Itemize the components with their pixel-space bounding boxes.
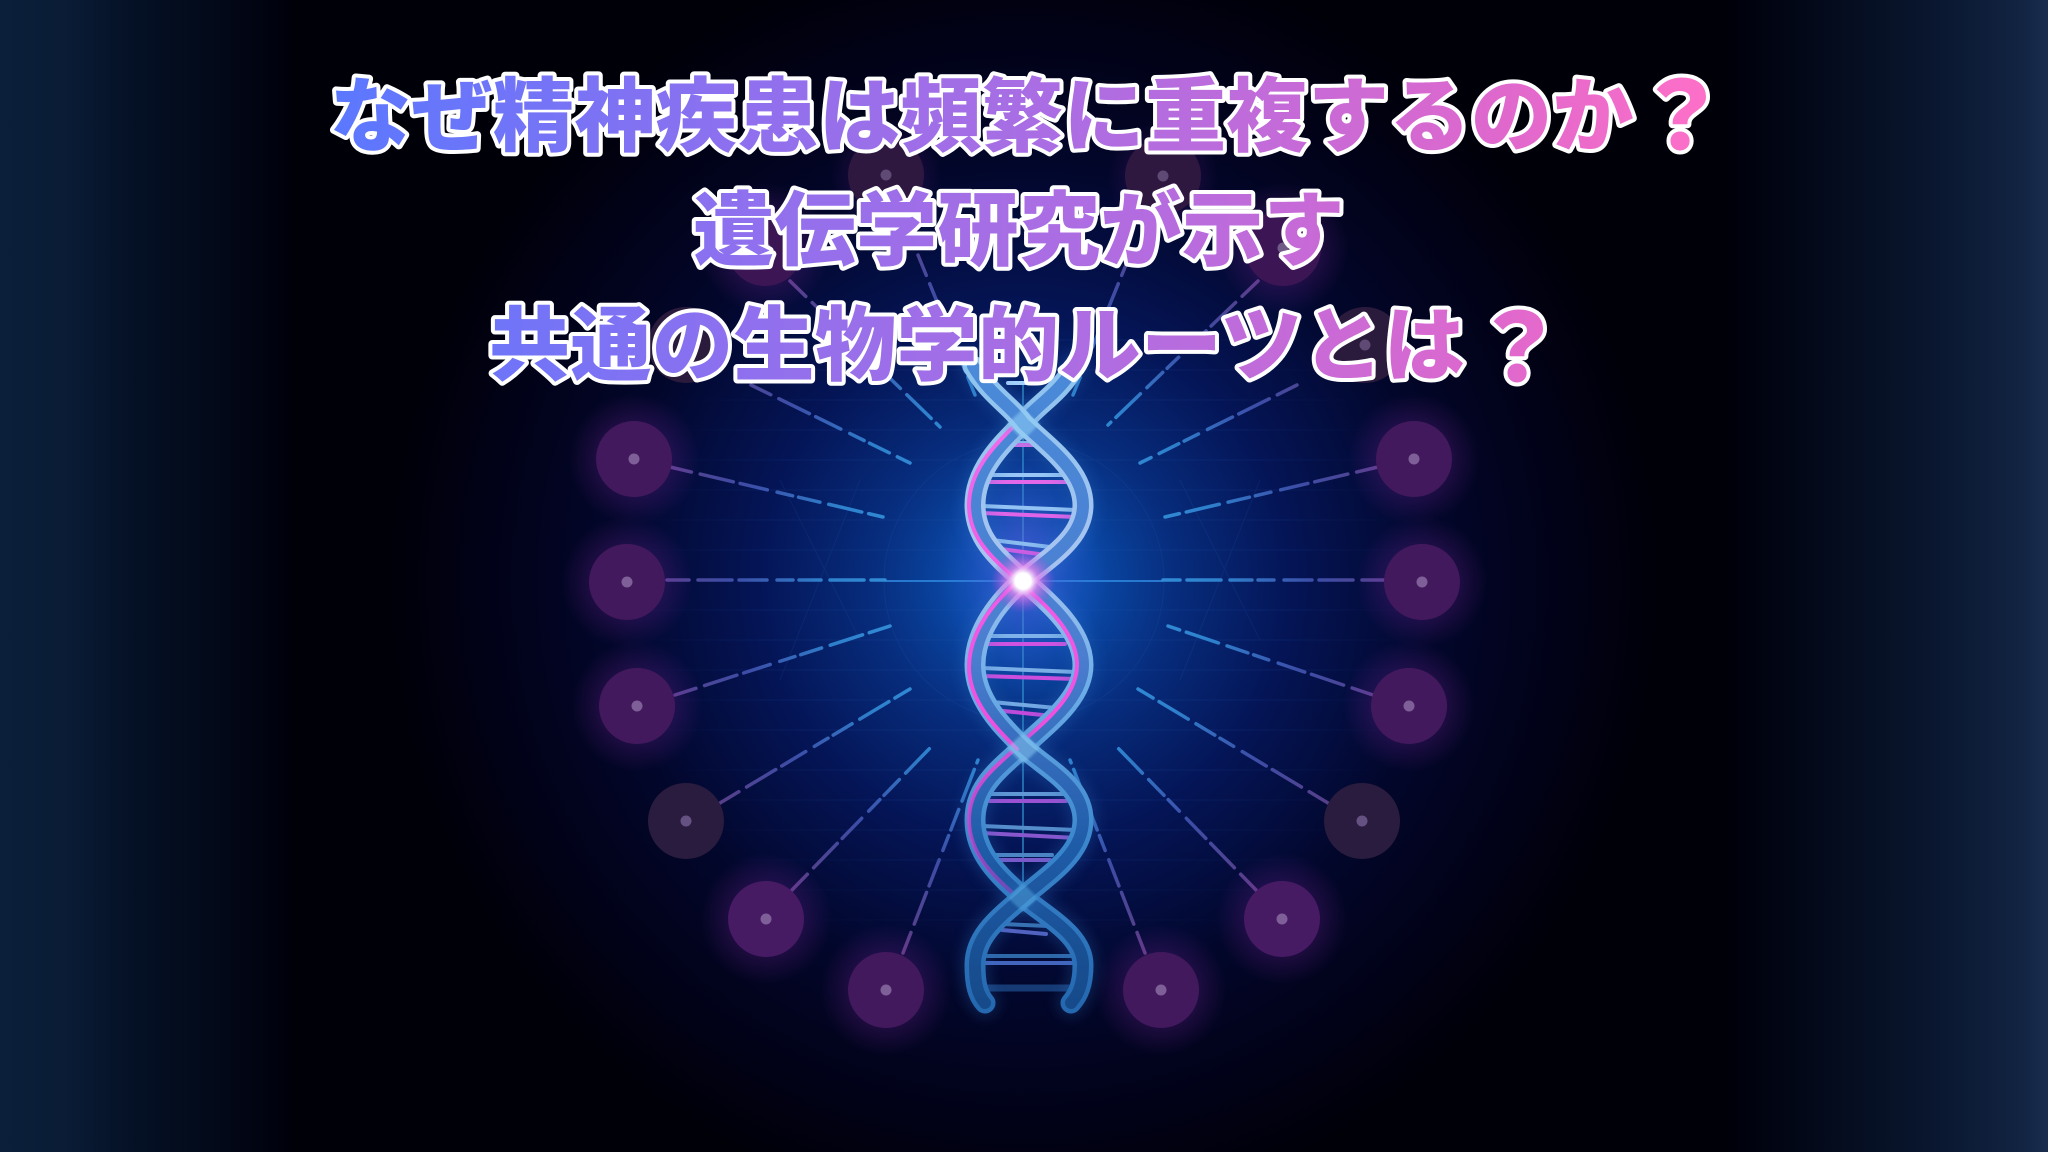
node: right lower — [1343, 640, 1475, 772]
right node ring — [1095, 120, 1488, 1056]
title line 2: 遺伝学研究が示す — [693, 187, 1345, 277]
node: top left inner — [830, 119, 942, 231]
node: left high grey — [648, 307, 724, 383]
title line 3: 共通の生物学的ルーツとは — [489, 302, 1465, 392]
left node ring — [561, 119, 952, 1056]
node: top right outer — [1217, 182, 1349, 314]
helix glow — [938, 440, 1108, 700]
crossing highlights — [1007, 409, 1040, 912]
title line 1: なぜ精神疾患は頻繁に重複するのか — [330, 73, 1634, 163]
radial dashed connectors: left — [667, 255, 978, 953]
base pair rungs — [982, 383, 1076, 988]
node: left low grey — [648, 783, 724, 859]
node: right upper — [1348, 393, 1480, 525]
central flare — [991, 549, 1055, 613]
node: left upper — [568, 393, 700, 525]
node: left middle — [561, 516, 693, 648]
faint technical grid and rings — [692, 340, 1356, 920]
node: bottom right inner — [1095, 924, 1227, 1056]
node: right high grey — [1327, 307, 1403, 383]
node: right low grey — [1324, 783, 1400, 859]
node: right middle — [1356, 516, 1488, 648]
node: top left outer — [699, 182, 831, 314]
DNA double helix — [938, 366, 1108, 1003]
front strand — [969, 366, 1083, 1003]
node: top right inner — [1107, 120, 1219, 232]
node: bottom right outer — [1216, 853, 1348, 985]
node: left lower — [571, 640, 703, 772]
title line 1: ？ — [1634, 64, 1728, 169]
node: bottom left outer — [700, 853, 832, 985]
node: bottom left inner — [820, 924, 952, 1056]
back strand — [969, 366, 1083, 1003]
axis lines — [885, 385, 1163, 905]
title — [330, 64, 1728, 401]
radial dashed connectors: right — [1070, 255, 1384, 953]
title line 3: ？ — [1471, 296, 1565, 401]
